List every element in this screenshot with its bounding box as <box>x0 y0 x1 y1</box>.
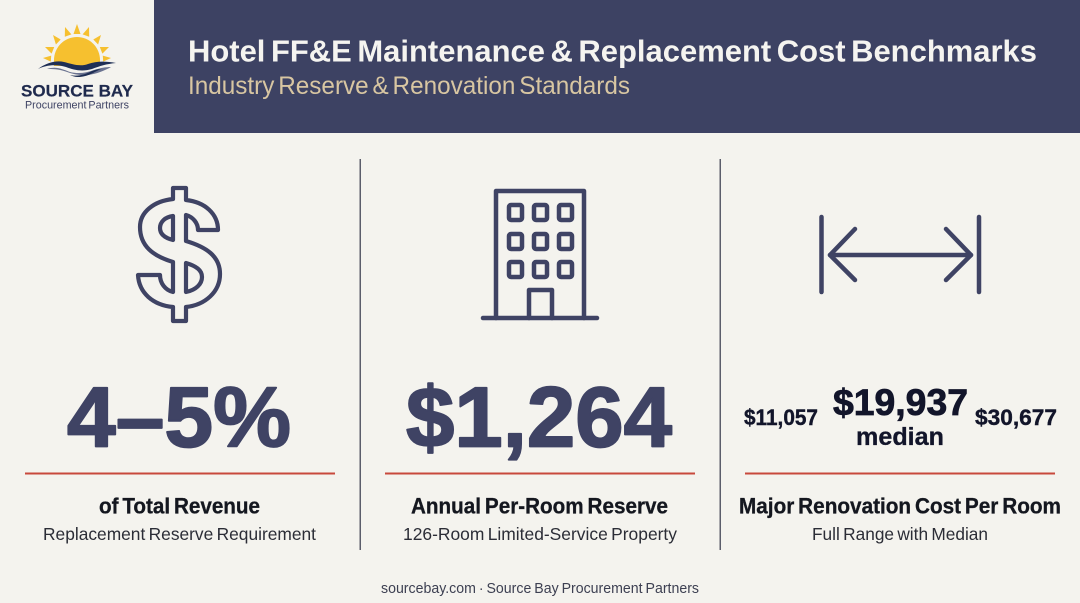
accent rule <box>385 472 695 474</box>
icon: dollar sign <box>138 188 220 321</box>
range low value: $11,057 <box>744 405 818 430</box>
title: Hotel FF&E Maintenance & Replacement Cost Benchmarks <box>188 34 1037 68</box>
divider <box>720 159 721 550</box>
label: Major Renovation Cost Per Room <box>739 494 1061 518</box>
logo: Source Bay <box>21 24 134 112</box>
icon: range arrow <box>822 217 979 292</box>
footer: sourcebay.com · Source Bay Procurement Partners <box>381 581 699 597</box>
subtitle: Industry Reserve & Renovation Standards <box>188 72 630 100</box>
logo tagline: Procurement Partners <box>25 100 129 112</box>
icon: hotel building <box>483 191 597 318</box>
icon: sun with rays <box>43 24 111 66</box>
accent rule <box>745 472 1055 474</box>
sublabel: 126-Room Limited-Service Property <box>403 524 677 544</box>
logo wordmark: SOURCE BAY <box>21 82 134 100</box>
label: of Total Revenue <box>99 494 260 518</box>
median label: median <box>856 423 944 451</box>
header banner <box>154 0 1080 133</box>
label: Annual Per-Room Reserve <box>411 494 668 518</box>
icon: waves <box>38 61 116 77</box>
range high value: $30,677 <box>975 405 1057 430</box>
panel: per-room reserve <box>385 191 695 544</box>
panel: replacement reserve <box>25 188 335 544</box>
median value: $19,937 <box>833 381 968 423</box>
divider <box>360 159 361 550</box>
statistic: 4–5%: 4–5% <box>67 370 291 466</box>
statistic: $1,264: $1,264 <box>406 370 672 466</box>
sublabel: Full Range with Median <box>812 524 988 544</box>
panel: renovation cost <box>739 217 1061 544</box>
sublabel: Replacement Reserve Requirement <box>43 524 316 544</box>
accent rule <box>25 472 335 474</box>
